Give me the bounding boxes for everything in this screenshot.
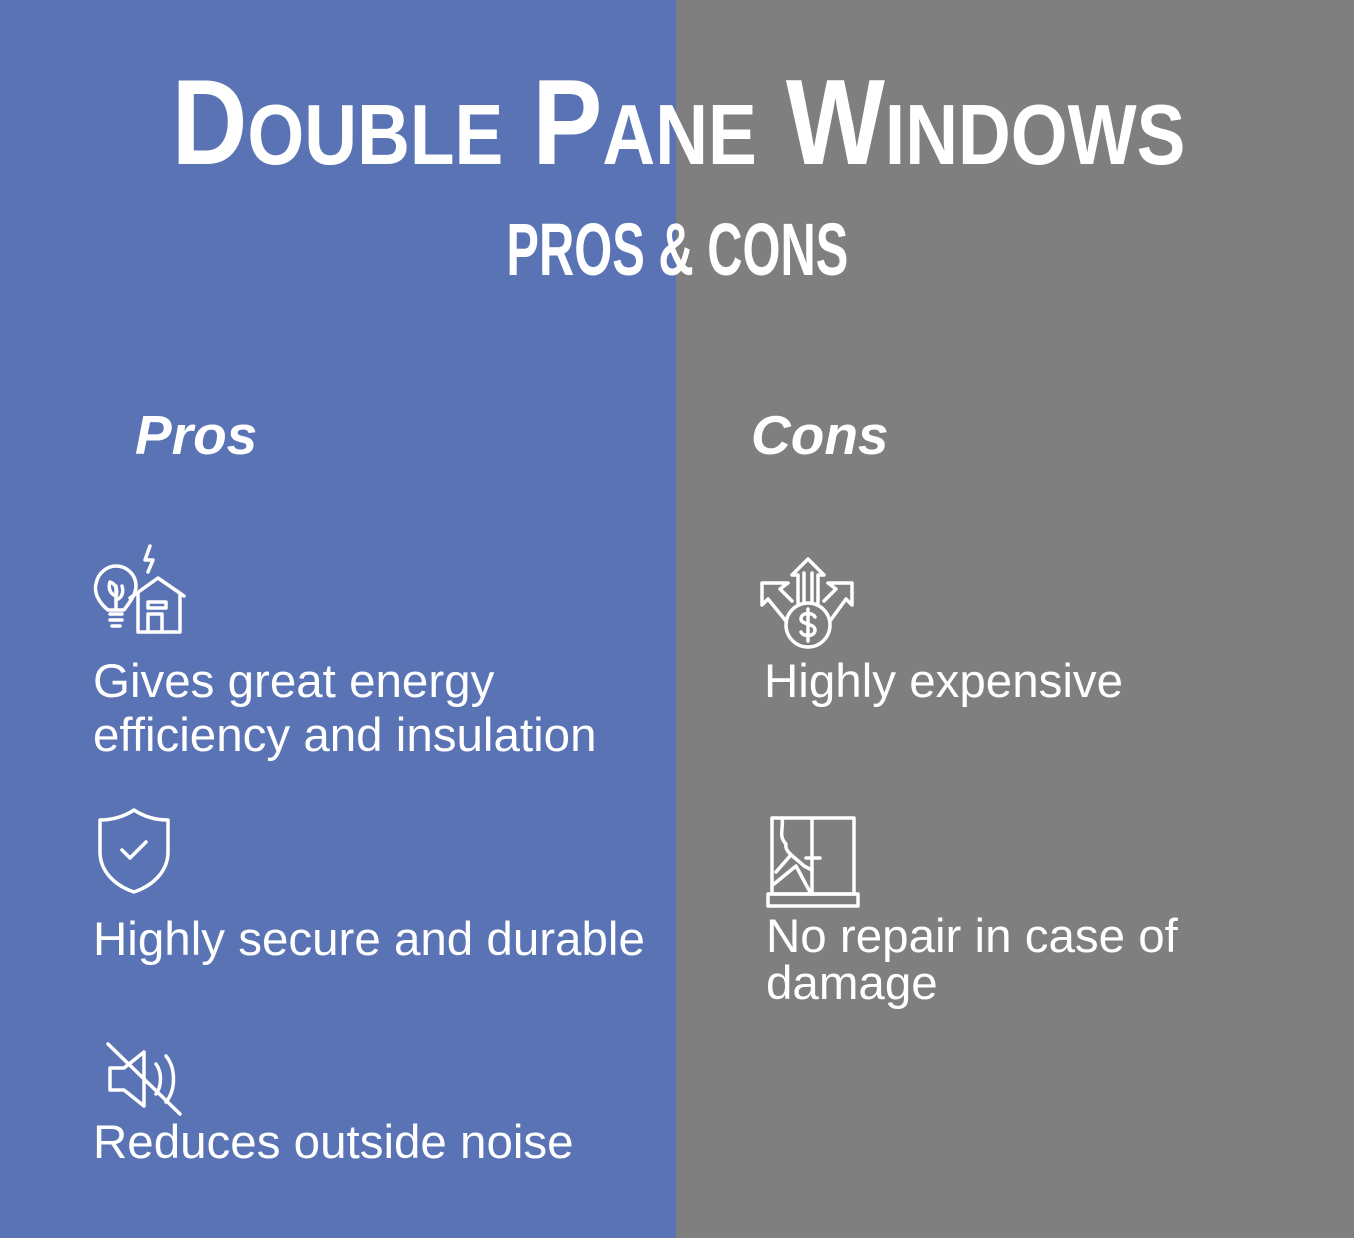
text: damage: damage — [766, 957, 938, 1010]
text: expensive: Highly expensive — [764, 655, 1123, 708]
icon: shield — [98, 808, 170, 894]
text: energy: Gives great energy — [93, 655, 494, 708]
icon: broken window — [766, 816, 860, 908]
title: Double Pane Windows — [172, 54, 1185, 190]
icon: energy bulb house — [94, 544, 186, 634]
text: secure: Highly secure and durable — [93, 913, 645, 966]
text: damage: No repair in case of — [766, 910, 1178, 963]
text: energy — [93, 655, 596, 762]
heading: pros: Pros — [135, 404, 257, 466]
icon: muted speaker — [106, 1042, 182, 1116]
text: damage — [766, 910, 1178, 1010]
heading: cons: Cons — [751, 404, 888, 466]
text: energy: efficiency and insulation — [93, 709, 596, 762]
icon: expensive — [760, 557, 854, 649]
subtitle: PROS & CONS — [506, 208, 848, 291]
text: noise: Reduces outside noise — [93, 1116, 574, 1169]
